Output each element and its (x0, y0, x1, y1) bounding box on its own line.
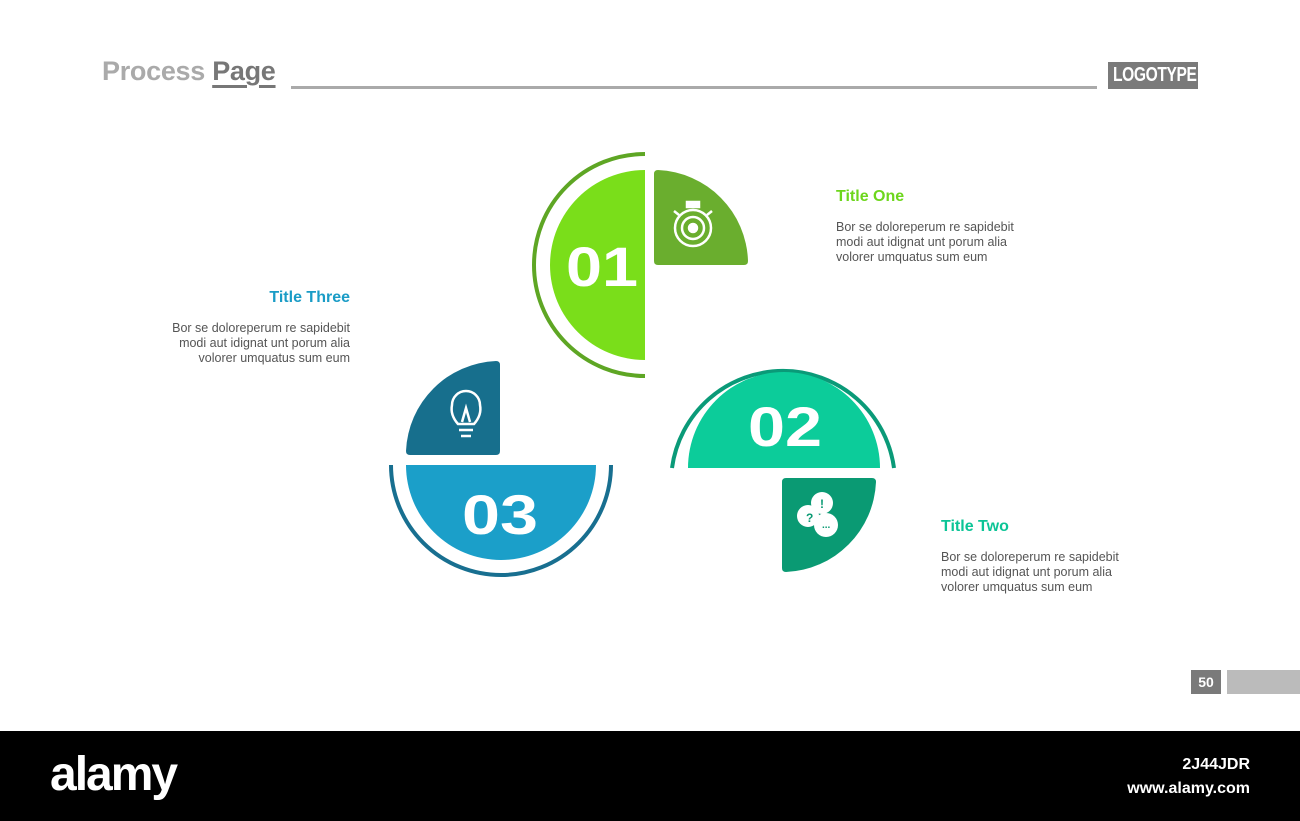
segment 02: 02 (748, 395, 822, 458)
footer ids: 2J44JDR (1182, 756, 1250, 773)
logo: LOGOTYPE (1113, 64, 1197, 86)
text block: title three: Bor se doloreperum re sapidebit (172, 321, 350, 335)
text block: title one: Title One (836, 188, 904, 205)
text block: title one: modi aut idignat unt porum alia (836, 235, 1007, 249)
icon: speech bubbles: ... (822, 520, 831, 531)
page number (1191, 670, 1221, 694)
text block: title two: Title Two (941, 518, 1009, 535)
icon: speech bubbles: ! (820, 497, 824, 511)
segment 01 (534, 154, 748, 376)
icon: speech bubbles (797, 492, 838, 537)
footer ids (1127, 756, 1250, 797)
text block: title three: modi aut idignat unt porum alia (179, 336, 350, 350)
footer logo: alamy (50, 748, 176, 801)
header rule (291, 86, 1097, 89)
text block: title two (941, 518, 1119, 594)
text block: title three: volorer umquatus sum eum (199, 351, 350, 365)
text block: title two: volorer umquatus sum eum (941, 580, 1092, 594)
footer ids: www.alamy.com (1127, 780, 1250, 797)
segment 03 (391, 361, 611, 575)
icon: stopwatch gear (674, 202, 712, 246)
header title: Process Page (102, 56, 276, 86)
footer (0, 731, 1300, 821)
text block: title two: modi aut idignat unt porum alia (941, 565, 1112, 579)
icon: speech bubbles: ? (806, 511, 813, 525)
page bar (1227, 670, 1300, 694)
text block: title three (172, 289, 350, 365)
text block: title three: Title Three (269, 289, 350, 306)
page number: 50 (1198, 674, 1214, 690)
segment 03: 03 (462, 483, 538, 546)
text block: title one (836, 188, 1014, 264)
text block: title one: volorer umquatus sum eum (836, 250, 987, 264)
segment 02 (672, 371, 894, 572)
icon: light bulb (452, 391, 480, 436)
text block: title two: Bor se doloreperum re sapidebit (941, 550, 1119, 564)
segment 01: 01 (566, 235, 638, 298)
text block: title one: Bor se doloreperum re sapidebit (836, 220, 1014, 234)
